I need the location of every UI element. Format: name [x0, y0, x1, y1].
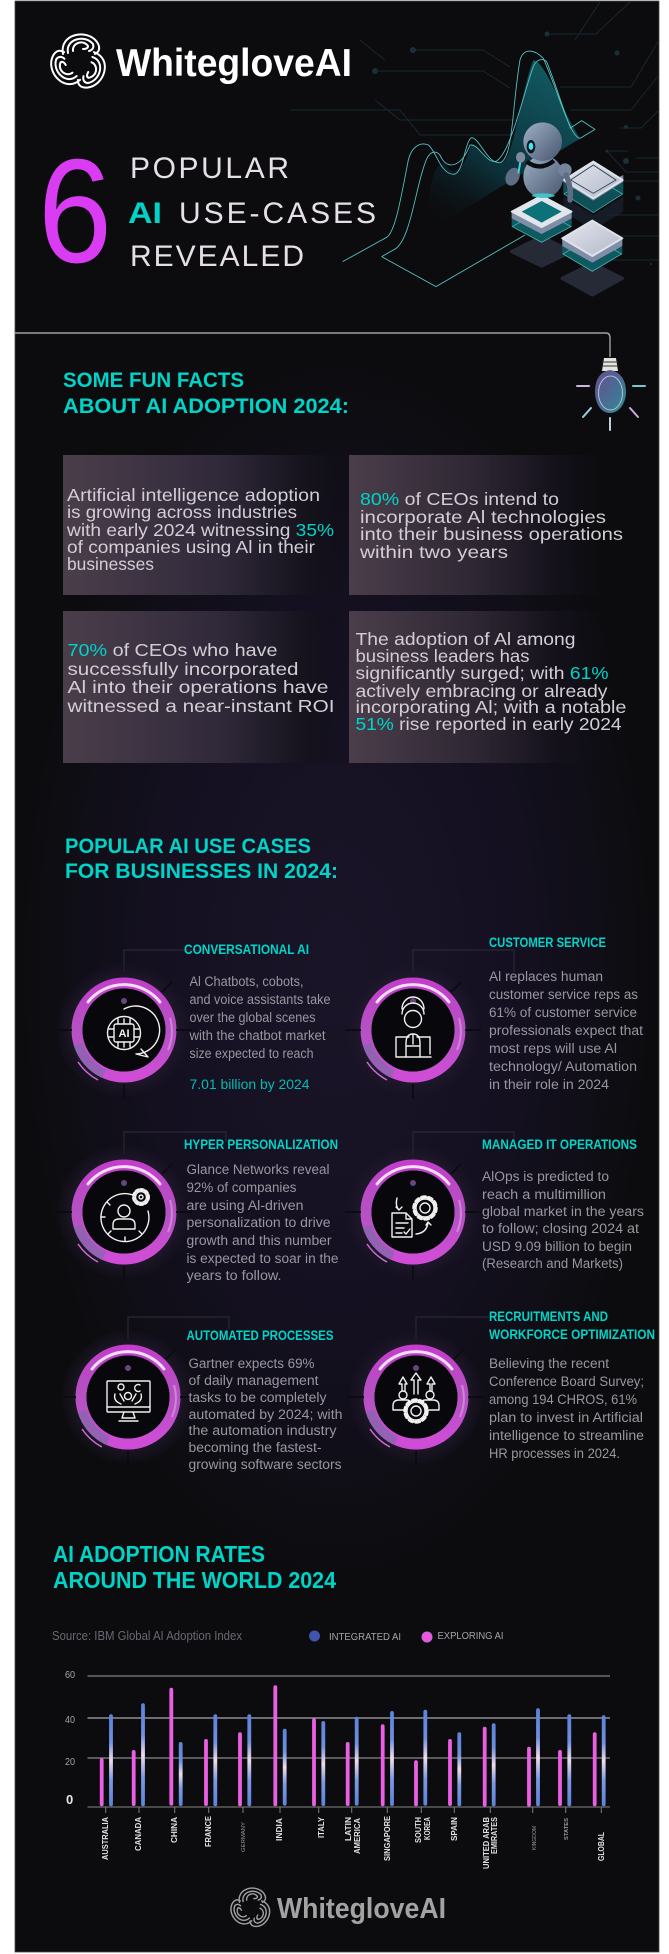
- title: 6 popular AI use-cases revealed: USE-CASES: [179, 197, 376, 230]
- use case: customer service: in their role in 2024: [489, 1077, 610, 1092]
- icon: fingerprint mark: [45, 34, 111, 93]
- use case: recruitments and workforce optimization: plan to invest in Artificial: [489, 1410, 643, 1425]
- y axis gridlines and labels: 60: [65, 1669, 75, 1681]
- use case: managed IT operations: MANAGED IT OPERATIONS: [482, 1137, 637, 1152]
- panel: fact 61% business leaders: 51% rise reported in early 2024: [356, 714, 622, 734]
- heading: popular AI use cases: FOR BUSINESSES IN 2024:: [65, 860, 338, 883]
- chart legend: INTEGRATED AI: [329, 1631, 401, 1643]
- use case: managed IT operations: global market in the years: [482, 1204, 644, 1219]
- x axis country labels: AMERICA: [352, 1818, 362, 1854]
- integrated AI bars (blue): [109, 1703, 606, 1806]
- ring with people and gear icon: [348, 1331, 484, 1465]
- panel: fact 35% adoption: [63, 455, 347, 595]
- use case: automated processes: AUTOMATED PROCESSES: [186, 1328, 334, 1343]
- x axis country labels: KINGDOM: [532, 1826, 538, 1850]
- robot: [503, 122, 572, 200]
- heading: AI adoption rates: [53, 1541, 336, 1593]
- use case: hyper personalization: 92% of companies: [186, 1180, 297, 1195]
- use case: managed IT operations: USD 9.09 billion to begin: [482, 1239, 632, 1254]
- use case: automated processes: automated by 2024; with: [188, 1407, 342, 1422]
- use case: recruitments and workforce optimization: Conference Board Survey;: [489, 1374, 644, 1389]
- footer logo: WhitegloveAI: [227, 1888, 446, 1931]
- use case: managed IT operations: to follow; closing 2024 at: [482, 1221, 639, 1236]
- use case: customer service: professionals expect that: [489, 1023, 643, 1038]
- x axis country labels: LATIN: [343, 1817, 353, 1841]
- x axis country labels: ITALY: [316, 1817, 326, 1838]
- panel: fact 80% of CEOs: incorporate Al technologies: [360, 507, 606, 527]
- chart lines: [343, 51, 595, 287]
- chart legend: [309, 1630, 504, 1643]
- use case: automated processes: of daily management: [188, 1373, 319, 1388]
- logo: WhitegloveAI: WhitegloveAI: [116, 42, 352, 85]
- ring with person and gear icon: [56, 1146, 192, 1280]
- big number 6: 6: [38, 129, 112, 294]
- use case: customer service: CUSTOMER SERVICE: [489, 935, 606, 950]
- connector line to light bulb: [15, 333, 610, 357]
- panel: fact 61% business leaders: The adoption of Al among: [356, 629, 576, 649]
- use case: hyper personalization: [56, 1132, 338, 1283]
- isometric tile: hollow middle: [512, 196, 572, 266]
- x axis country labels: SOUTH: [413, 1817, 423, 1843]
- panel: fact 80% of CEOs: within two years: [359, 542, 508, 562]
- bar chart: AI adoption by country: [65, 1669, 610, 1869]
- title: 6 popular AI use-cases revealed: REVEALED: [130, 240, 304, 273]
- heading: AI adoption rates: AROUND THE WORLD 2024: [53, 1567, 336, 1593]
- use case: conversational AI: CONVERSATIONAL AI: [184, 942, 309, 957]
- isometric tile: bottom right: [562, 221, 622, 295]
- exploring AI bars (pink): [100, 1685, 597, 1807]
- use case: managed IT operations: (Research and Markets): [482, 1256, 623, 1271]
- x axis country labels: GERMANY: [241, 1821, 247, 1852]
- panel: fact 70% of CEOs: 70% of CEOs who have: [68, 640, 278, 660]
- panel: fact 35% adoption: with early 2024 witnessing 35%: [66, 520, 334, 540]
- use case: customer service: most reps will use Al: [489, 1041, 617, 1056]
- x axis country labels: CANADA: [133, 1817, 143, 1851]
- heading: popular AI use cases: [65, 835, 338, 883]
- panel: fact 35% adoption: is growing across industries: [67, 502, 297, 522]
- y axis gridlines and labels: [65, 1669, 610, 1807]
- panel: fact 61% business leaders: business leaders has: [356, 646, 530, 666]
- use case: customer service: 61% of customer service: [489, 1005, 637, 1020]
- x axis country labels: UNITED ARAB: [481, 1817, 491, 1869]
- x axis country labels: AUSTRALIA: [100, 1817, 110, 1860]
- y axis gridlines and labels: 20: [65, 1756, 75, 1768]
- use case: automated processes: tasks to be completely: [188, 1390, 327, 1405]
- use case: hyper personalization: are using Al-driven: [186, 1198, 304, 1213]
- use case: conversational AI: with the chatbot market: [189, 1028, 326, 1043]
- use case: automated processes: [60, 1317, 342, 1472]
- x axis country labels: CHINA: [169, 1817, 179, 1843]
- panel: fact 61% business leaders: significantly surged; with 61%: [356, 663, 608, 683]
- use case: automated processes: growing software sectors: [188, 1457, 342, 1472]
- logo: WhitegloveAI: [45, 34, 352, 93]
- x axis country labels: EMIRATES: [489, 1817, 499, 1854]
- use case: recruitments and workforce optimization: Believing the recent: [489, 1356, 609, 1371]
- panel: fact 70% of CEOs: [63, 611, 347, 763]
- heading: some fun facts: [63, 369, 349, 418]
- panel: fact 61% business leaders: [349, 611, 626, 763]
- panel: fact 70% of CEOs: successfully incorporated: [68, 659, 298, 679]
- isometric tile: top right: [563, 162, 623, 230]
- panel: fact 80% of CEOs: [349, 455, 623, 595]
- icon: light bulb: [577, 358, 645, 430]
- x axis country labels: GLOBAL: [596, 1832, 606, 1861]
- y axis gridlines and labels: 0: [66, 1792, 73, 1807]
- panel: fact 70% of CEOs: witnessed a near-instant ROI: [66, 696, 334, 716]
- title: 6 popular AI use-cases revealed: AI: [128, 197, 162, 230]
- title: 6 popular AI use-cases revealed: [38, 129, 376, 294]
- title: 6 popular AI use-cases revealed: POPULAR: [130, 152, 289, 185]
- ring with chat chip icon: AI: [118, 1028, 130, 1040]
- use case: automated processes: the automation industry: [188, 1423, 337, 1438]
- x axis country labels: STATES: [564, 1817, 570, 1840]
- ring with agent icon: [345, 964, 481, 1098]
- use case: managed IT operations: [345, 1132, 644, 1280]
- x axis country labels: SPAIN: [449, 1817, 459, 1841]
- panel: fact 35% adoption: businesses: [67, 554, 154, 574]
- use case: conversational AI: Al Chatbots, cobots,: [190, 974, 304, 989]
- chart legend: EXPLORING AI: [438, 1630, 504, 1642]
- use case: hyper personalization: years to follow.: [186, 1268, 282, 1283]
- x axis country labels: KOREA: [422, 1817, 432, 1840]
- use case: customer service: customer service reps as: [489, 987, 638, 1002]
- panel: fact 80% of CEOs: into their business operations: [360, 524, 623, 544]
- use case: managed IT operations: reach a multimillion: [482, 1187, 606, 1202]
- panel: fact 61% business leaders: incorporating Al; with a notable: [356, 697, 626, 717]
- teal chart mountain: [425, 60, 595, 233]
- use case: conversational AI: size expected to reach: [190, 1046, 314, 1061]
- use case: hyper personalization: HYPER PERSONALIZATION: [184, 1137, 338, 1152]
- use case: managed IT operations: AlOps is predicted to: [482, 1169, 609, 1184]
- x axis country labels: INDIA: [274, 1818, 284, 1841]
- illustration: robot on isometric data chart: [343, 51, 623, 295]
- x axis country labels: [100, 1816, 606, 1869]
- x axis country labels: FRANCE: [203, 1816, 213, 1847]
- use case: conversational AI: over the global scenes: [190, 1010, 316, 1025]
- use case: recruitments and workforce optimization: HR processes in 2024.: [489, 1446, 620, 1461]
- use case: customer service: [345, 935, 643, 1098]
- icon: fingerprint mark grey: [227, 1888, 274, 1931]
- use case: recruitments and workforce optimization: among 194 CHROS, 61%: [489, 1392, 637, 1407]
- x axis country labels: SINGAPORE: [382, 1816, 392, 1861]
- use case: conversational AI: 7.01 billion by 2024: [190, 1077, 310, 1092]
- ring with document and gear icon: [345, 1146, 481, 1280]
- heading: popular AI use cases: POPULAR AI USE CASES: [65, 835, 311, 858]
- panel: fact 80% of CEOs: 80% of CEOs intend to: [360, 489, 559, 509]
- use case: hyper personalization: is expected to soar in the: [186, 1251, 338, 1266]
- use case: conversational AI: and voice assistants take: [190, 992, 330, 1007]
- source note: Source: IBM Global AI Adoption Index: [52, 1628, 242, 1643]
- heading: some fun facts: SOME FUN FACTS: [63, 369, 244, 392]
- use case: customer service: technology/ Automation: [489, 1059, 637, 1074]
- ring with chat chip icon: [56, 964, 192, 1098]
- use case: recruitments and workforce optimization: [348, 1309, 655, 1465]
- use case: recruitments and workforce optimization: intelligence to streamline: [489, 1428, 644, 1443]
- heading: some fun facts: ABOUT AI ADOPTION 2024:: [63, 395, 349, 418]
- ring with monitor icon: [60, 1331, 196, 1465]
- x axis ticks: [106, 1807, 601, 1813]
- footer logo: WhitegloveAI: WhitegloveAI: [277, 1893, 446, 1925]
- circuit background lines: [290, 2, 659, 265]
- panel: fact 35% adoption: Artificial intelligence adoption: [67, 485, 320, 505]
- use case: conversational AI: [56, 942, 330, 1098]
- use case: customer service: Al replaces human: [489, 969, 603, 984]
- use case: hyper personalization: growth and this number: [186, 1233, 332, 1248]
- use case: automated processes: Gartner expects 69%: [188, 1356, 314, 1371]
- heading: AI adoption rates: AI ADOPTION RATES: [53, 1541, 265, 1567]
- use case: hyper personalization: personalization to drive: [186, 1215, 330, 1230]
- panel: fact 35% adoption: of companies using Al in their: [67, 537, 315, 557]
- use case: hyper personalization: Glance Networks reveal: [186, 1162, 330, 1177]
- panel: fact 61% business leaders: actively embracing or already: [356, 681, 608, 701]
- y axis gridlines and labels: 40: [65, 1714, 75, 1726]
- use case: recruitments and workforce optimization: RECRUITMENTS AND: [489, 1309, 608, 1324]
- use case: automated processes: becoming the fastest-: [188, 1440, 322, 1455]
- panel: fact 70% of CEOs: Al into their operations have: [68, 677, 328, 697]
